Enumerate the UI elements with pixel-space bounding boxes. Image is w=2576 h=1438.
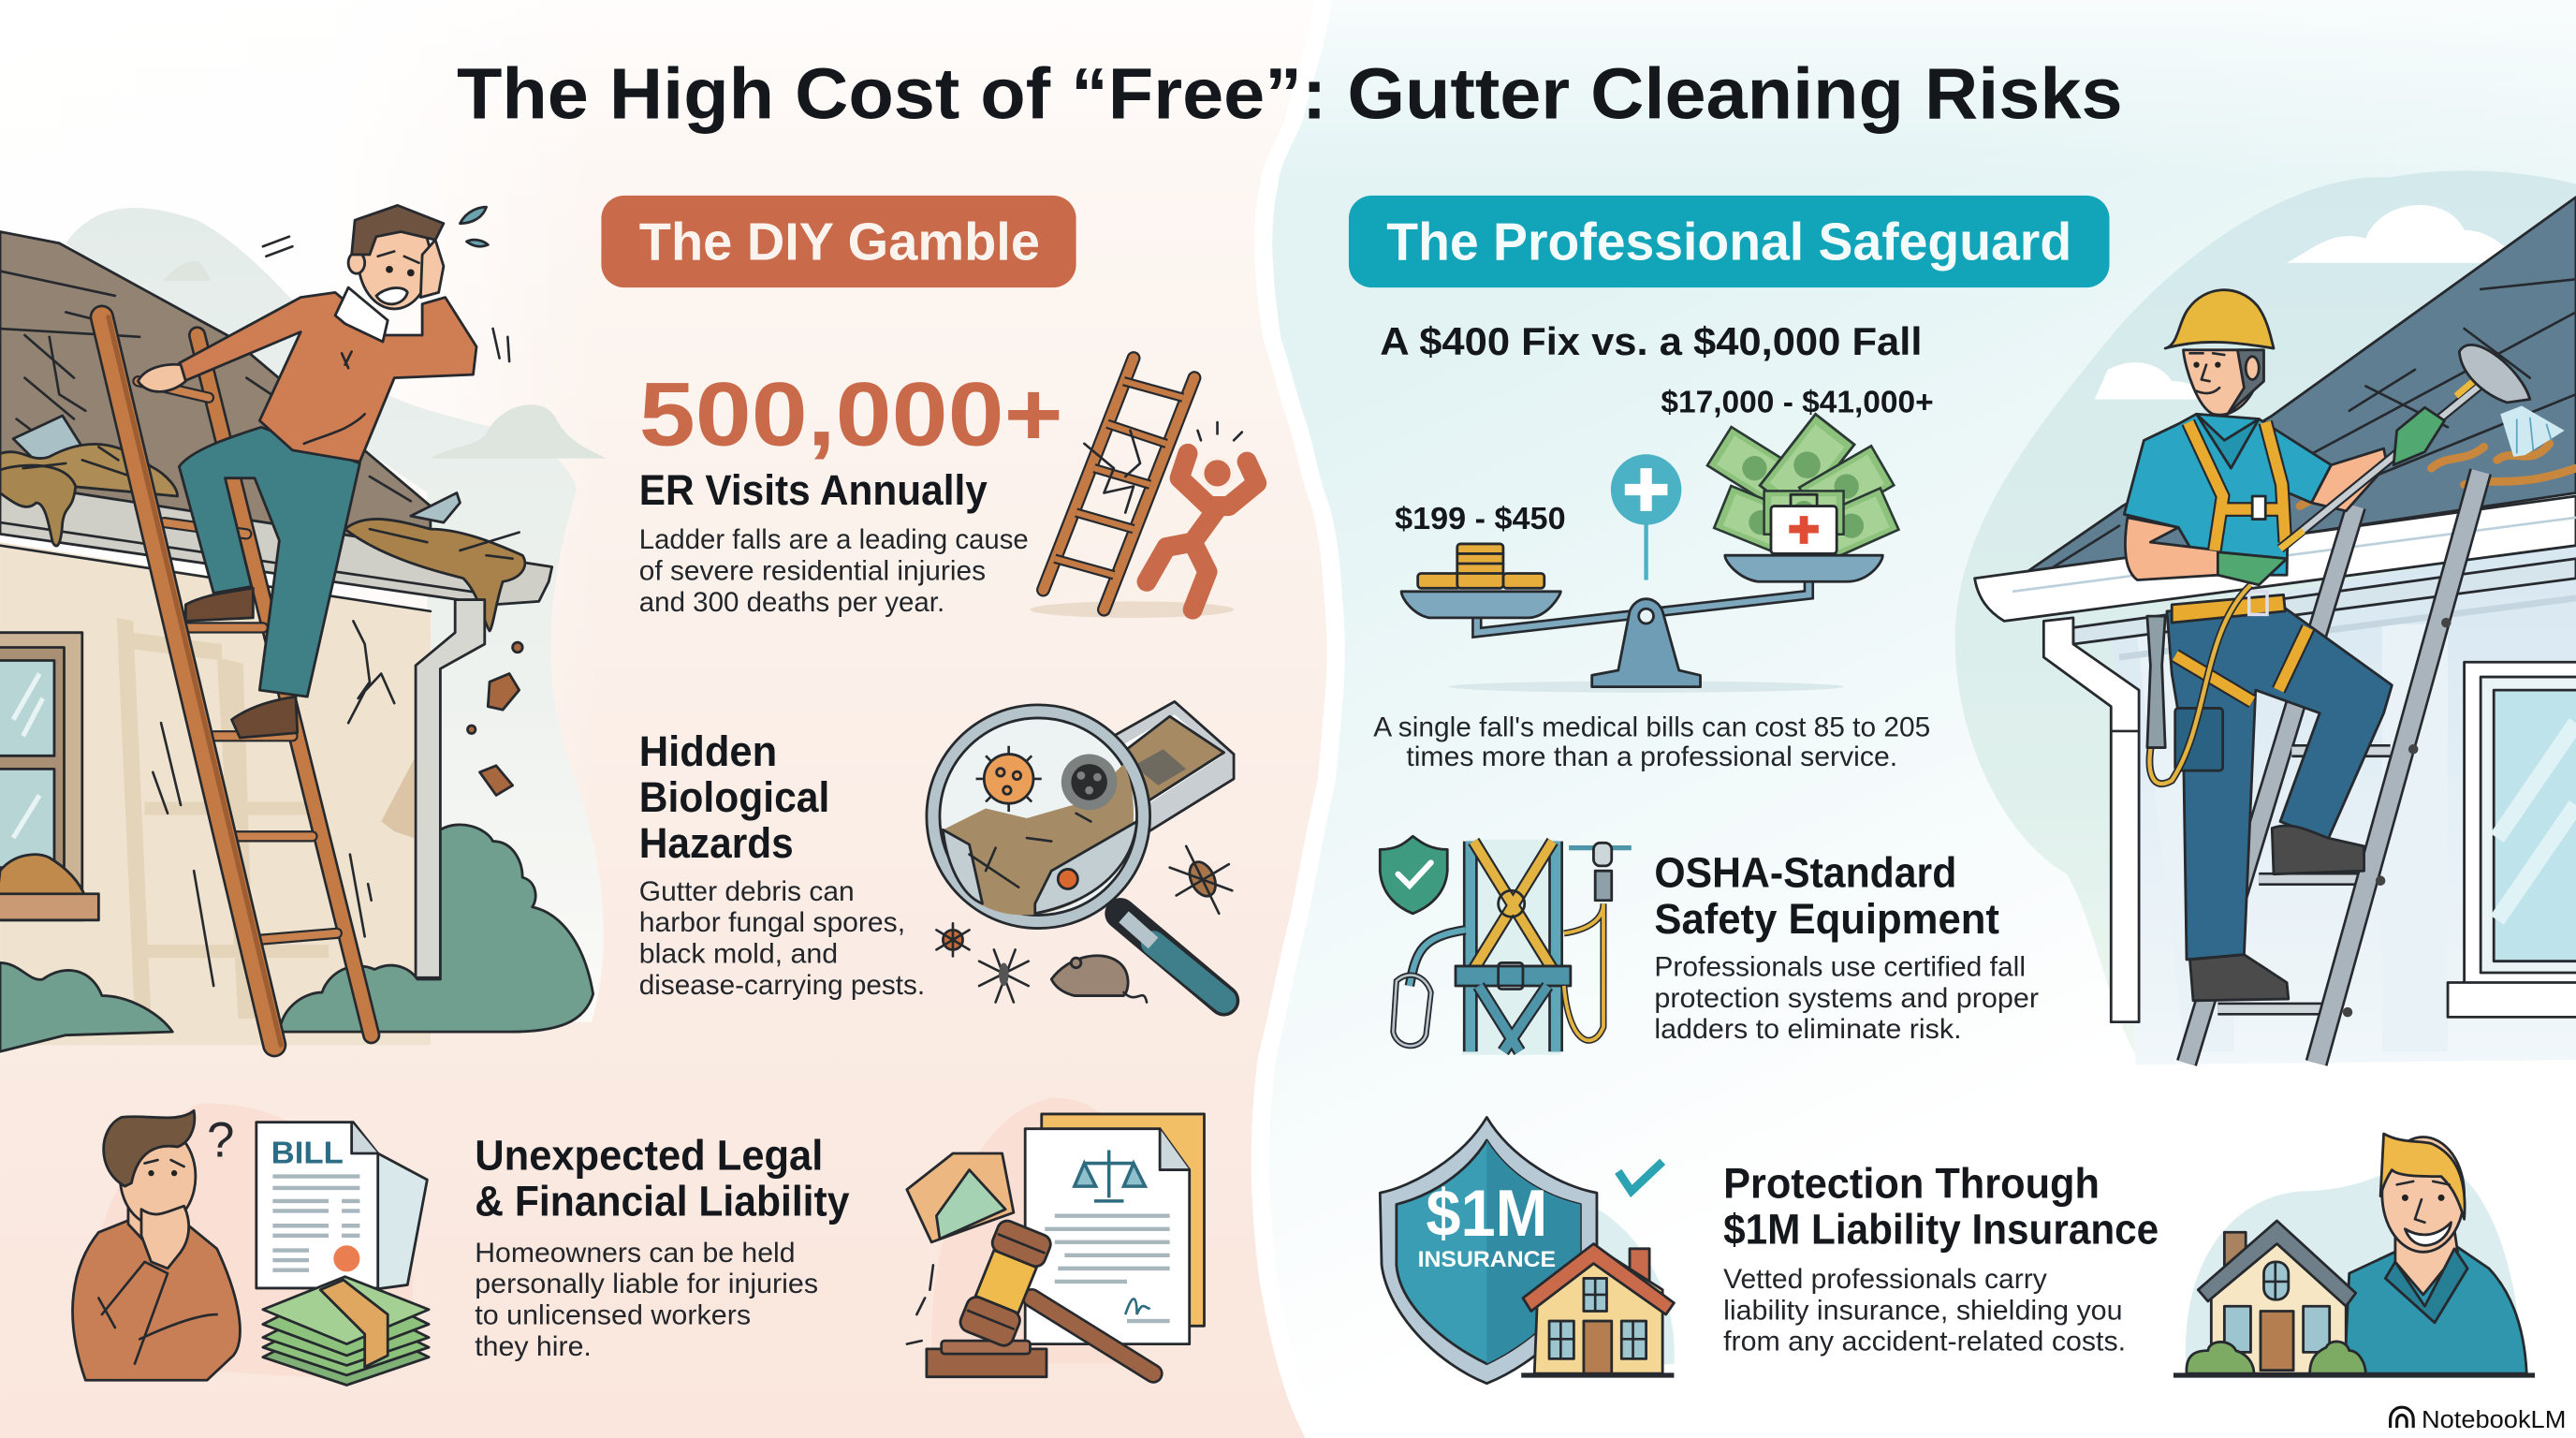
falling debris <box>468 642 522 795</box>
badge: The DIY Gamble <box>601 196 1076 287</box>
icon: $1M insurance shield with house: $1M <box>1426 1176 1547 1250</box>
text: OSHA-standard safety equipment: protection systems and proper <box>1654 983 2039 1014</box>
text: unexpected legal and financial liability: Unexpected Legal <box>475 1132 823 1180</box>
illustration: professional on ladder with harness <box>1955 170 2576 1064</box>
panel: The DIY Gamble <box>73 196 1257 1385</box>
text: protection through $1M liability insurance: Vetted professionals carry <box>1723 1264 2047 1295</box>
roof <box>0 231 431 552</box>
roof <box>2022 198 2576 575</box>
text: OSHA-standard safety equipment: Safety Equipment <box>1654 895 1999 943</box>
label: high cost: $17,000 - $41,000+ <box>1661 386 1934 420</box>
cloud <box>431 404 607 459</box>
icon: magnifier over gutter with pests <box>927 701 1234 1003</box>
text: cost comparison caption <box>1373 712 1930 772</box>
icon: $1M insurance shield with house: INSURANCE <box>1418 1248 1556 1272</box>
text: protection through $1M liability insurance: from any accident-related costs. <box>1723 1327 2126 1357</box>
text: protection through $1M liability insurance: $1M Liability Insurance <box>1723 1206 2159 1254</box>
money and medical kit <box>1707 414 1898 564</box>
gutter with debris <box>0 481 552 605</box>
text: hidden biological hazards: Biological <box>639 773 829 821</box>
panel: The Professional Safeguard <box>1349 196 2535 1384</box>
icon: safety harness and green shield <box>1380 836 1632 1055</box>
coins <box>1418 544 1544 588</box>
text: OSHA-standard safety equipment: Professionals use certified fall <box>1654 951 2026 982</box>
stat: 500,000+ ER visits <box>639 365 1063 618</box>
gutter <box>1975 496 2576 621</box>
aluminum ladder <box>2187 472 2481 1064</box>
title: The High Cost of “Free”: Gutter Cleaning Risks <box>457 53 2123 134</box>
stat: 500,000+ ER visits: Ladder falls are a leading cause <box>639 524 1029 555</box>
text: cost comparison caption: A single fall's medical bills can cost 85 to 205 <box>1373 712 1930 742</box>
stat: 500,000+ ER visits: and 300 deaths per year. <box>639 587 944 618</box>
text: protection through $1M liability insurance <box>1723 1159 2159 1357</box>
background: top fade <box>1265 0 2576 181</box>
text: unexpected legal and financial liability: to unlicensed workers <box>475 1300 751 1331</box>
downspout <box>416 600 485 977</box>
text: OSHA-standard safety equipment <box>1654 849 2039 1045</box>
stat: 500,000+ ER visits: 500,000+ <box>639 365 1063 465</box>
text: OSHA-standard safety equipment: ladders to eliminate risk. <box>1654 1014 1962 1045</box>
text: hidden biological hazards <box>639 727 925 1001</box>
chart: balance scale of costs <box>1401 414 1898 693</box>
heading: $400 fix vs $40,000 fall: A $400 Fix vs. a $40,000 Fall <box>1380 319 1922 363</box>
text: unexpected legal and financial liability: personally liable for injuries <box>475 1269 818 1299</box>
background: DIY side <box>0 0 1327 1438</box>
badge: The DIY Gamble: The DIY Gamble <box>639 212 1040 271</box>
bushes <box>279 825 593 1032</box>
text: hidden biological hazards: black mold, and <box>639 938 838 969</box>
text: cost comparison caption: times more than a professional service. <box>1406 741 1897 772</box>
worker in harness <box>2124 290 2565 1001</box>
text: unexpected legal and financial liability: & Financial Liability <box>475 1178 850 1225</box>
logo: NotebookLM: NotebookLM <box>2422 1405 2566 1433</box>
text: hidden biological hazards: Gutter debris can <box>639 876 855 907</box>
label: low cost: $199 - $450 <box>1395 502 1566 536</box>
icon: worried man with bill and money <box>73 1104 429 1385</box>
text: hidden biological hazards: Hidden <box>639 727 777 775</box>
window <box>0 633 98 920</box>
text: hidden biological hazards: Hazards <box>639 819 794 867</box>
text: hidden biological hazards: harbor fungal spores, <box>639 907 905 938</box>
wall and window <box>2111 542 2576 1064</box>
background: white curved divider <box>1150 0 1345 1438</box>
question mark: ? <box>207 1113 234 1168</box>
ladder <box>102 317 372 1045</box>
icon: gavel and legal document <box>907 1097 1204 1377</box>
icon: broken ladder and falling figure <box>1030 359 1257 618</box>
badge: The Professional Safeguard: The Professional Safeguard <box>1386 212 2071 271</box>
stat: 500,000+ ER visits: ER Visits Annually <box>639 466 988 514</box>
debris <box>2300 444 2576 506</box>
text: unexpected legal and financial liability <box>475 1132 850 1362</box>
stat: 500,000+ ER visits: of severe residential injuries <box>639 556 986 587</box>
text: protection through $1M liability insurance: Protection Through <box>1723 1159 2100 1207</box>
icon: smiling homeowner with house <box>2174 1134 2535 1375</box>
text: hidden biological hazards: disease-carrying pests. <box>639 970 925 1001</box>
illustration: homeowner falling from ladder <box>0 0 607 1055</box>
pole and sprayer <box>2280 365 2505 549</box>
badge: The Professional Safeguard <box>1349 196 2110 287</box>
motion lines and sweat drops <box>153 207 509 986</box>
text: unexpected legal and financial liability: Homeowners can be held <box>475 1238 795 1269</box>
text: unexpected legal and financial liability: they hire. <box>475 1331 592 1362</box>
text: OSHA-standard safety equipment: OSHA-Standard <box>1654 849 1956 897</box>
man in orange sweater <box>138 205 476 738</box>
icon: $1M insurance shield with house <box>1380 1117 1675 1384</box>
icon: worried man with bill and money: BILL <box>271 1137 344 1171</box>
clouds <box>2287 205 2522 263</box>
text: protection through $1M liability insurance: liability insurance, shielding you <box>1723 1295 2123 1326</box>
wall <box>0 542 431 1045</box>
